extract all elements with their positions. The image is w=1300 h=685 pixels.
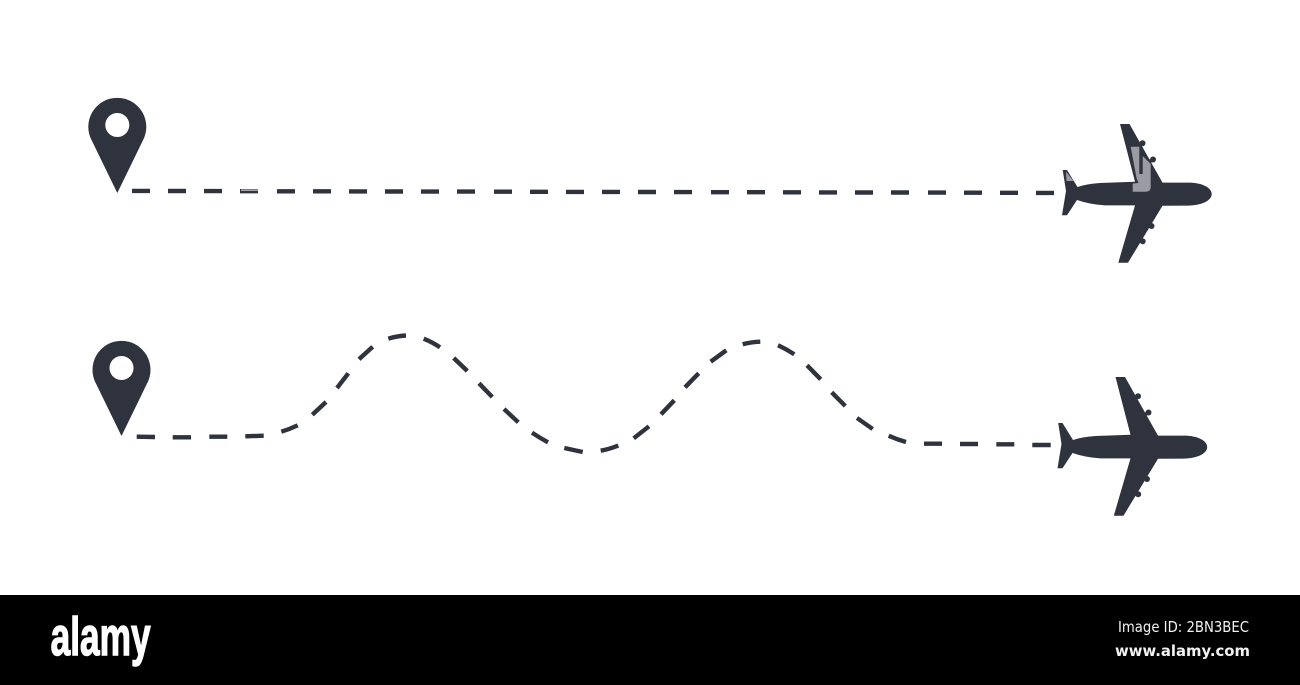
website URL: www.alamy.com [1115, 642, 1250, 660]
icon: location pin, straight route [88, 98, 146, 193]
watermark fragment on airplane wing [1131, 147, 1151, 192]
icon: location pin, winding route [93, 341, 150, 436]
watermark fragment on airplane tail [1066, 172, 1074, 181]
image ID: Image ID: 2BN3BEC [1118, 618, 1249, 636]
icon: airplane, winding route [1058, 377, 1207, 516]
logo: alamy: alamy [51, 607, 151, 667]
icon: airplane, straight route [1062, 124, 1212, 263]
panel: winding route [93, 336, 1207, 516]
footer band [0, 595, 1300, 685]
panel: straight route [88, 98, 1212, 263]
straight dashed path [132, 190, 1054, 193]
winding dashed path [137, 336, 1051, 452]
